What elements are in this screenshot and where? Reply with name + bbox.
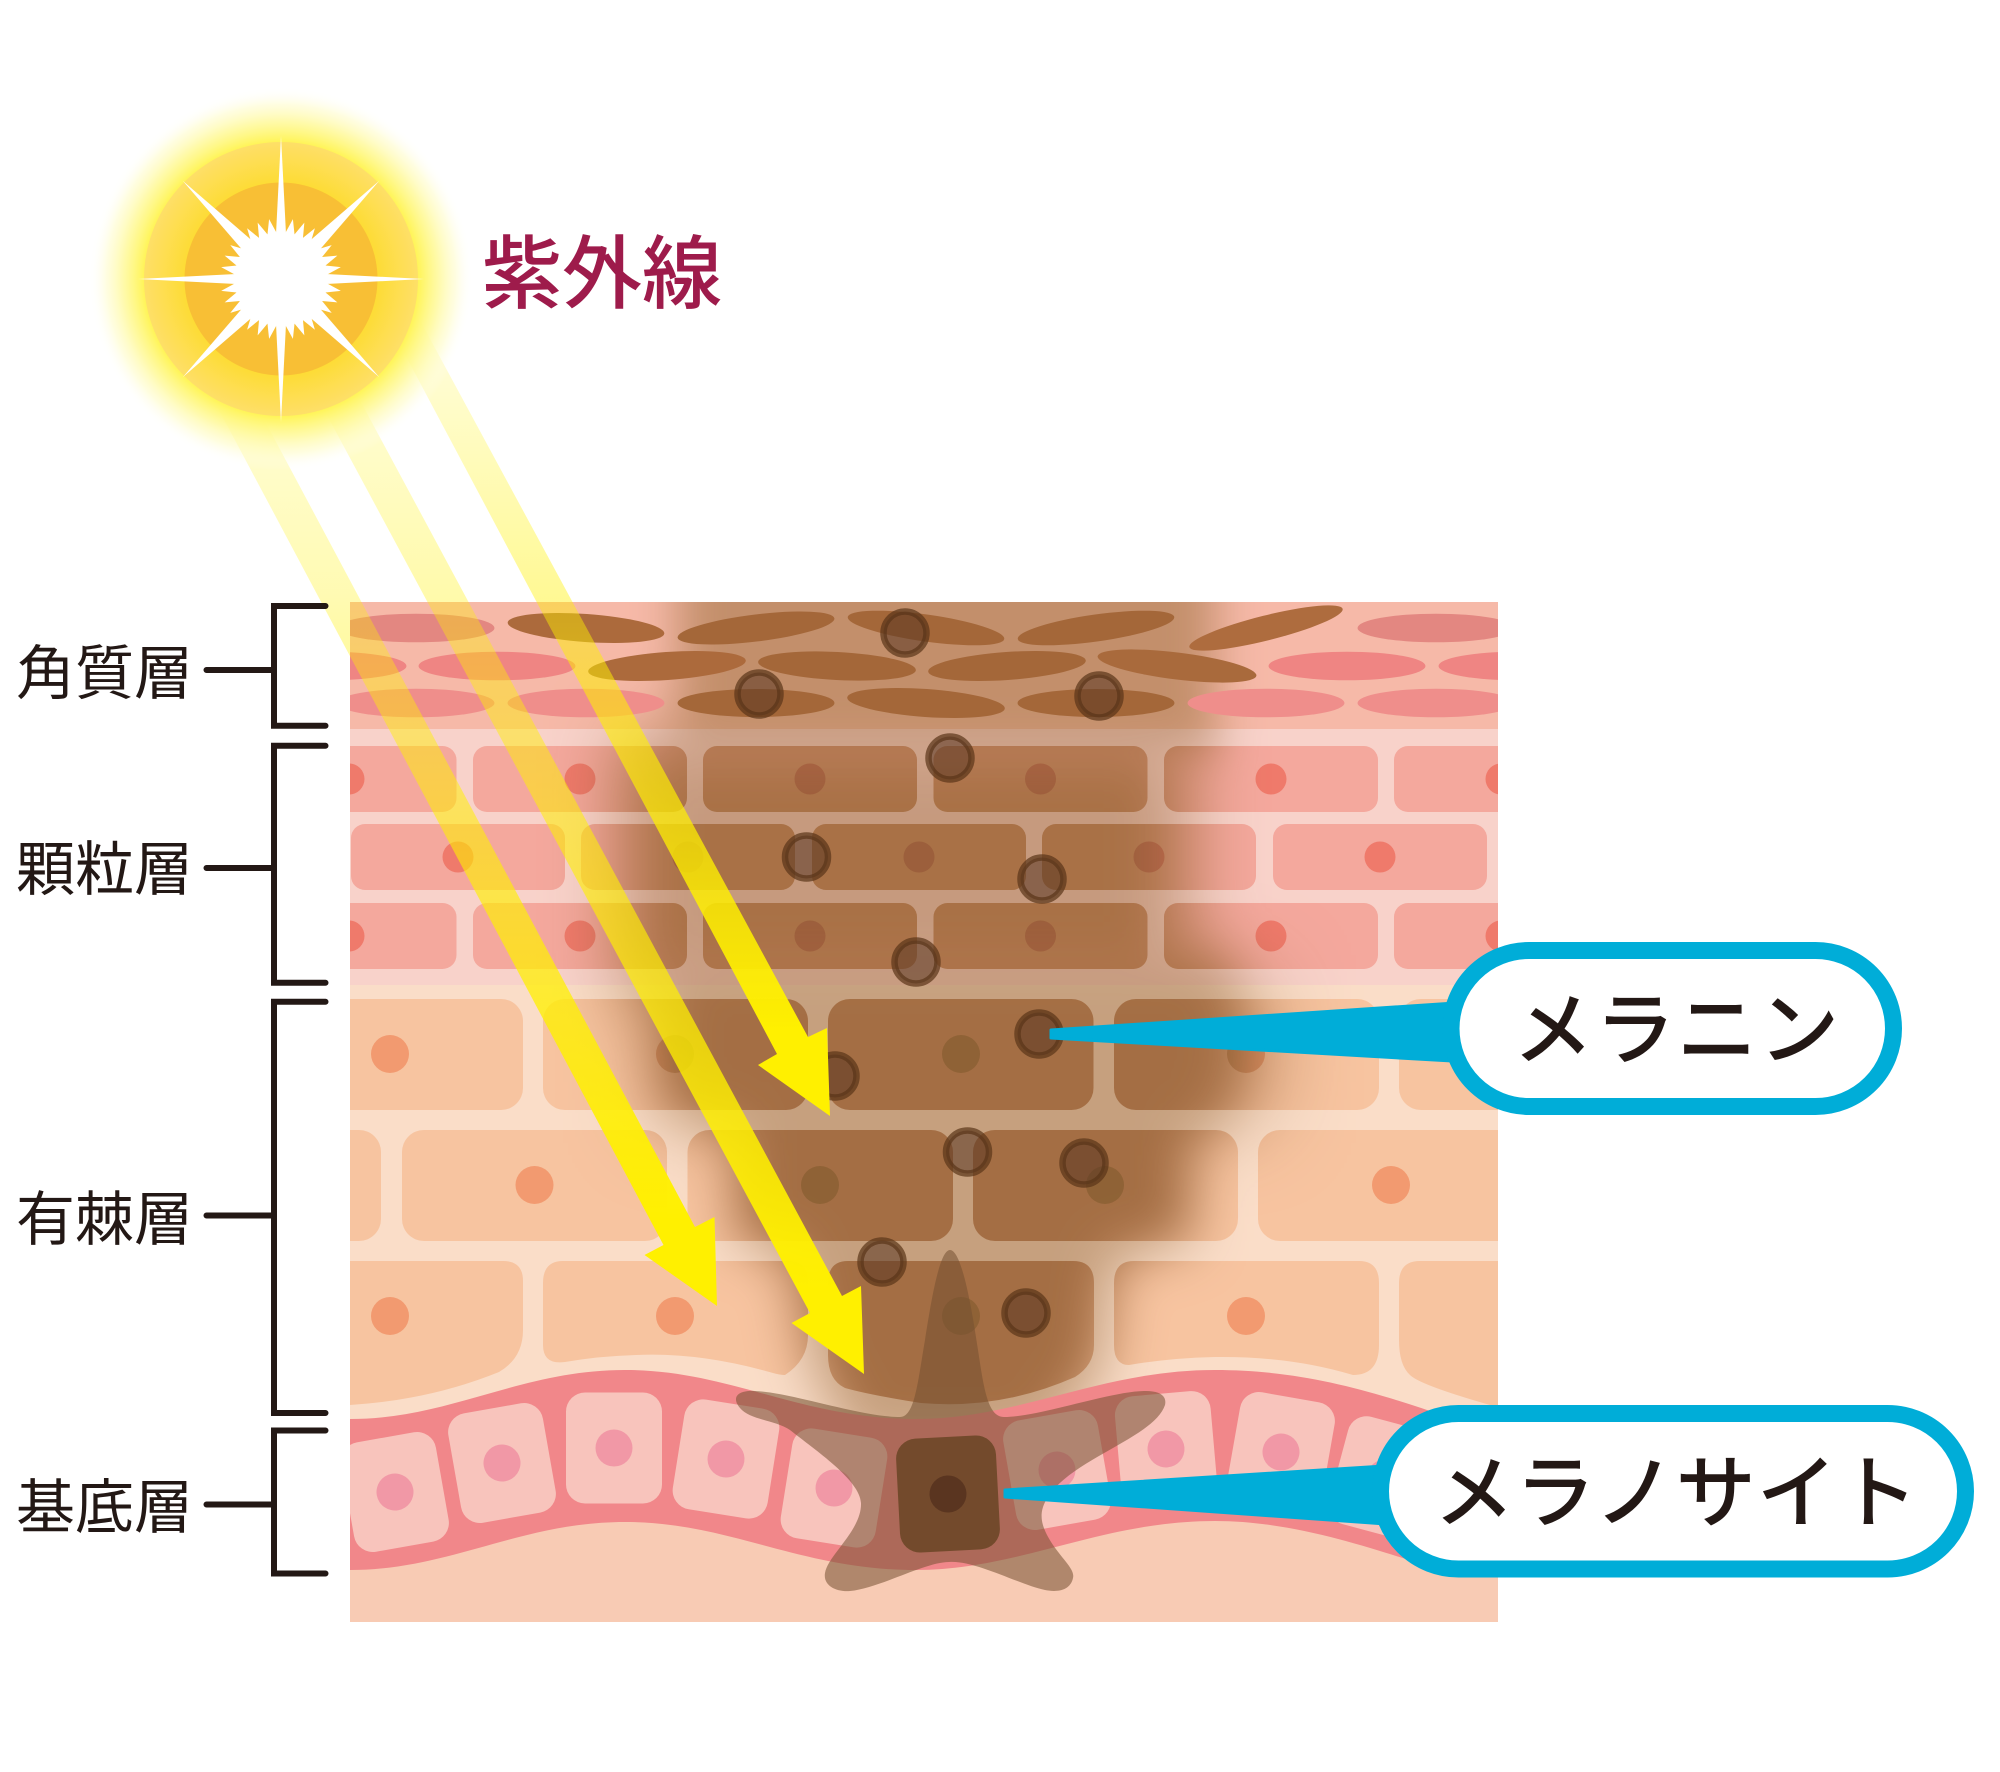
heading: ultraviolet: 紫外線: [482, 230, 722, 319]
layer background: granular layer: [350, 729, 1498, 985]
melanin particles: [738, 612, 1120, 1334]
label: granular layer: 顆粒層: [16, 837, 193, 903]
sun outer disc: [144, 142, 418, 416]
granular layer nuclei: [334, 764, 1516, 952]
label: granular layer: [16, 746, 326, 983]
spinous layer cells: [350, 999, 1498, 1405]
label: stratum corneum: [16, 606, 326, 726]
callout: melanocyte: [1005, 1414, 1966, 1569]
skin cross-section panel: [350, 602, 1498, 1622]
callout: melanocyte: メラノサイト: [1434, 1449, 1918, 1538]
granular layer cells: [350, 746, 1498, 969]
callout: melanin: [1051, 950, 1894, 1106]
sun white starburst: [138, 136, 424, 422]
arrow: middle UV ray: [265, 300, 864, 1374]
icon: sun: [89, 87, 473, 471]
sun glow: [89, 87, 473, 471]
melanocyte nucleus: [929, 1475, 967, 1513]
label: spinous layer: 有棘層: [16, 1187, 193, 1253]
label: spinous layer: [16, 1002, 326, 1413]
melanocyte star body: [736, 1250, 1165, 1591]
label: basal layer: [16, 1430, 326, 1574]
arrow: left UV ray: [187, 350, 717, 1306]
UV ray arrows: [187, 300, 864, 1374]
sun inner disc: [184, 182, 378, 376]
callout: melanin: メラニン: [1513, 986, 1839, 1075]
arrow: right UV ray: [376, 300, 830, 1116]
spinous layer nuclei: [371, 1035, 1410, 1335]
label: basal layer: 基底層: [16, 1475, 193, 1541]
basal layer band: [350, 1370, 1498, 1572]
corneum flakes: [350, 605, 1498, 718]
melanocyte cell: [895, 1434, 1001, 1554]
basal layer cells: [338, 1389, 1446, 1555]
layer background: stratum corneum: [350, 602, 1498, 729]
label: stratum corneum: 角質層: [16, 641, 193, 707]
melanin brown shadow column: [574, 602, 1312, 1419]
layer labels and brackets: [16, 606, 326, 1574]
dermis background: [350, 1521, 1498, 1622]
layer background: spinous layer: [350, 985, 1498, 1419]
